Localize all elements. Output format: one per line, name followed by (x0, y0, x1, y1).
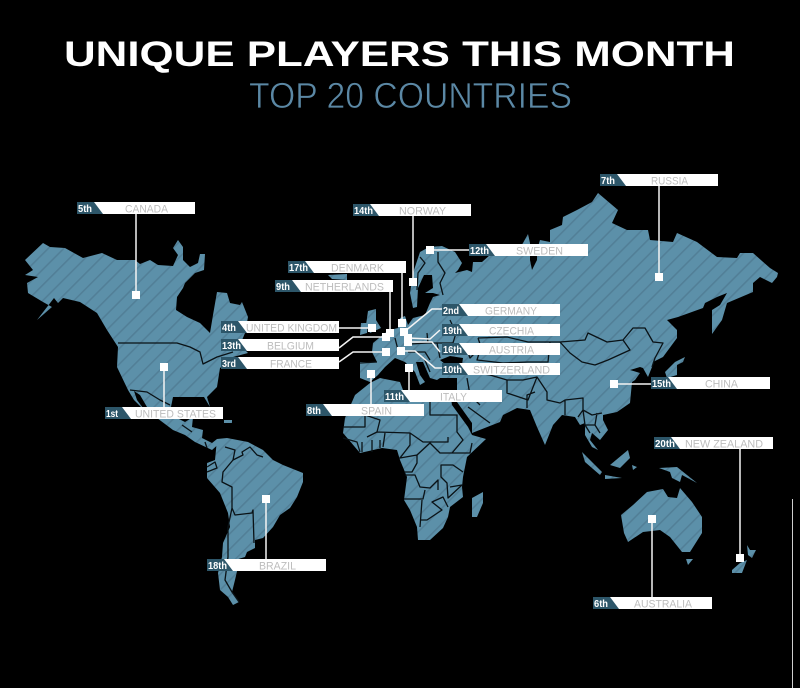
label: Belgium: BELGIUM (267, 340, 314, 352)
label: Austria: 16th (443, 345, 462, 356)
label: China (651, 377, 770, 390)
title: UNIQUE PLAYERS THIS MONTH (64, 35, 735, 74)
label: Austria: AUSTRIA (489, 344, 535, 356)
label: United Kingdom (221, 321, 339, 334)
marker squares (132, 246, 744, 562)
label: Netherlands (275, 280, 393, 294)
land: Africa (343, 378, 486, 540)
label: Brazil: 18th (208, 561, 227, 572)
subtitle: TOP 20 COUNTRIES (249, 75, 572, 116)
label: New Zealand (654, 437, 773, 450)
label: Australia: 6th (594, 599, 608, 610)
land: North and Central America (25, 240, 248, 450)
label: Germany: GERMANY (485, 306, 538, 318)
label: Spain (306, 404, 424, 418)
label: Germany: 2nd (443, 306, 459, 317)
label: Sweden (469, 244, 588, 258)
land: South America (207, 438, 303, 605)
label: China: CHINA (705, 378, 739, 390)
label: United States: UNITED STATES (135, 408, 216, 420)
label: Denmark (288, 261, 406, 274)
label: New Zealand: 20th (655, 439, 675, 450)
land: islands (224, 274, 756, 573)
label: New Zealand: NEW ZEALAND (685, 438, 763, 450)
label: Russia (600, 174, 718, 188)
label: United Kingdom: 4th (222, 323, 236, 334)
label: Switzerland: 10th (443, 365, 462, 376)
label: Sweden: 12th (470, 246, 489, 257)
label: France: FRANCE (270, 358, 312, 370)
country borders (118, 252, 663, 602)
label: China: 15th (652, 379, 671, 390)
black sea (440, 356, 463, 365)
label: Brazil (207, 559, 326, 572)
label: Netherlands: 9th (276, 282, 290, 293)
label: Italy: ITALY (440, 392, 468, 404)
label: United States (105, 407, 223, 420)
label: Canada: CANADA (125, 204, 169, 216)
label: Russia: RUSSIA (651, 176, 689, 188)
label: Sweden: SWEDEN (516, 246, 563, 258)
label: Italy: 11th (385, 392, 404, 403)
label: France (221, 357, 339, 370)
label: Canada (77, 202, 195, 216)
label: United Kingdom: UNITED KINGDOM (246, 322, 337, 334)
label: Switzerland: SWITZERLAND (473, 364, 550, 376)
label: Netherlands: NETHERLANDS (305, 282, 384, 294)
label: Czechia: 19th (443, 326, 462, 337)
label: France: 3rd (222, 359, 236, 370)
label: United States: 1st (106, 409, 119, 420)
label: Italy (384, 390, 502, 404)
label: Denmark: 17th (289, 263, 308, 274)
land: Eurasia (360, 193, 778, 450)
label: Russia: 7th (601, 176, 615, 187)
label: Norway: NORWAY (399, 206, 447, 218)
label: Spain: SPAIN (361, 406, 392, 418)
label: Norway (353, 204, 471, 218)
label: Switzerland (442, 363, 560, 376)
label: Germany (442, 304, 560, 318)
label: Belgium (221, 339, 339, 352)
pointer lines (136, 186, 740, 597)
world map (25, 193, 778, 605)
label: Czechia: CZECHIA (489, 326, 535, 338)
label: Australia (593, 597, 712, 610)
label: Brazil: BRAZIL (259, 560, 296, 572)
label: Norway: 14th (354, 206, 373, 217)
label: Australia: AUSTRALIA (634, 598, 693, 610)
label: Austria (442, 343, 560, 356)
label: Canada: 5th (78, 204, 92, 215)
label: Czechia (442, 324, 560, 338)
label: Spain: 8th (307, 406, 321, 417)
label: Denmark: DENMARK (331, 262, 385, 274)
label: Belgium: 13th (222, 341, 241, 352)
